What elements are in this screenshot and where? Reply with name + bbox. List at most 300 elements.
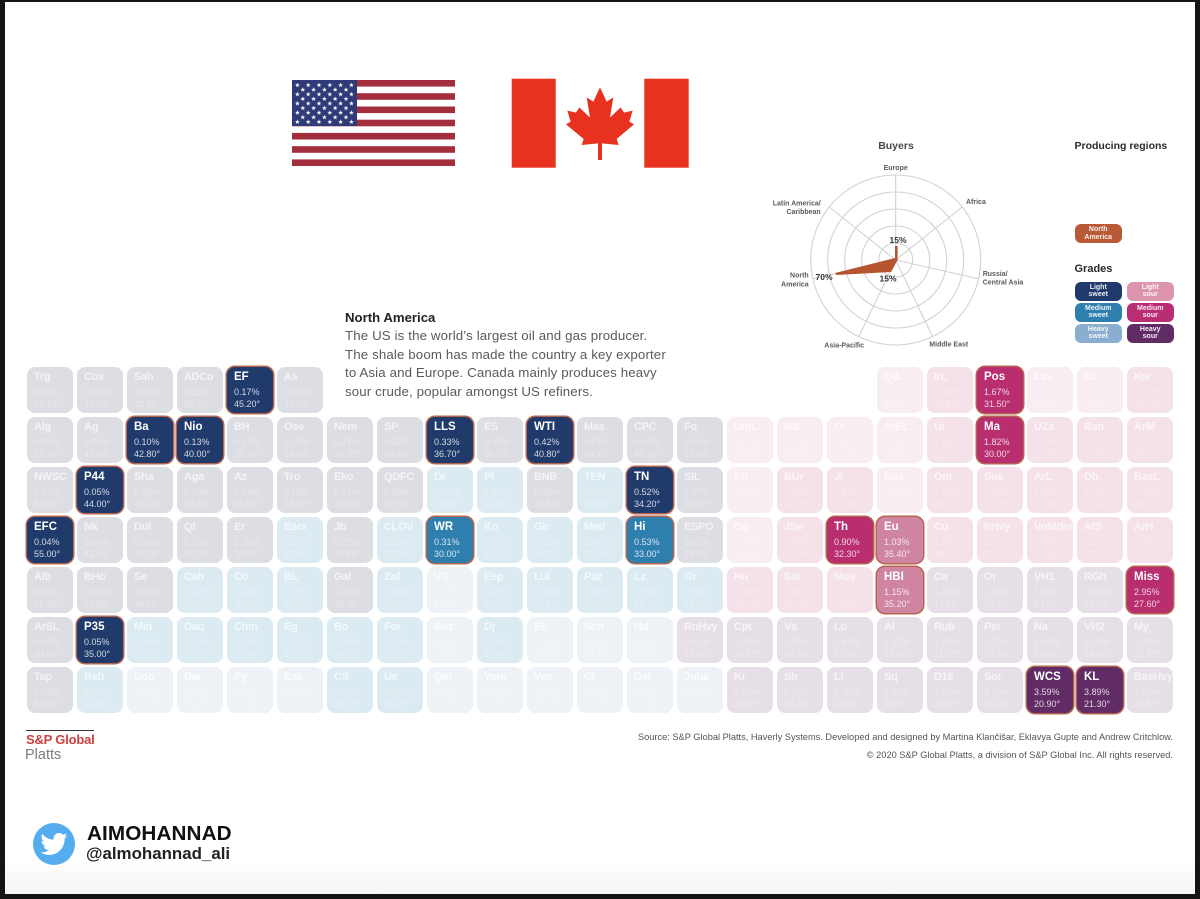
cell Lul: Lul — [534, 571, 550, 583]
cell Sat — [777, 567, 823, 613]
cell NWSC: 63.00° — [34, 498, 60, 508]
cell BNB: 0.40% — [534, 487, 560, 497]
cell BUr: 32.30° — [784, 498, 810, 508]
cell Daq: Daq — [184, 621, 204, 633]
cell Cu — [927, 517, 973, 563]
cell CLOV: CLOV — [384, 521, 413, 533]
cell FG: 30.70° — [734, 498, 760, 508]
cell Py — [227, 667, 273, 713]
cell AlS — [1077, 517, 1123, 563]
cell CS: CS — [334, 671, 349, 683]
cell Tap — [27, 667, 73, 713]
cell Ban: 2.45% — [1084, 437, 1110, 447]
cell Co: Co — [234, 571, 248, 583]
cell Tap: 0.03% — [34, 687, 60, 697]
radar chart: buyers — [773, 165, 1024, 350]
cell Tro: Tro — [284, 471, 300, 483]
cell Sha: 42.20° — [134, 498, 160, 508]
cell LLS: 36.70° — [434, 448, 460, 458]
cell Eu: 35.40° — [884, 548, 910, 558]
cell Kw: 2.52% — [1134, 387, 1160, 397]
cell ADCo: ADCo — [184, 371, 213, 383]
cell Sat: 0.81% — [784, 587, 810, 597]
cell Sh — [777, 667, 823, 713]
cell Fo: 0.54% — [684, 437, 710, 447]
cell AlS: 2.27% — [1084, 537, 1110, 547]
cell Ca: Ca — [934, 571, 947, 583]
cell Cpt — [727, 617, 773, 663]
cell Mb: 34.20° — [784, 448, 810, 458]
grade row 3 — [27, 466, 1173, 514]
cell Alb: Alb — [34, 571, 51, 583]
cell ES: 0.37% — [484, 437, 510, 447]
cell Fo: 37.30° — [684, 448, 710, 458]
cell Rab: 0.07% — [84, 687, 110, 697]
cell Pl: Pl — [484, 471, 494, 483]
cell P35: 35.00° — [84, 648, 110, 658]
cell Rab: Rab — [84, 671, 104, 683]
radar axis labels — [773, 165, 1023, 350]
cell KL: KL — [1084, 671, 1099, 683]
cell Lo: 22.30° — [834, 648, 860, 658]
grade row 2 — [27, 416, 1173, 464]
cell HBI: 35.20° — [884, 598, 910, 608]
cell BUr — [777, 467, 823, 513]
cell NWSC: 0.01% — [34, 487, 60, 497]
cell Mas — [577, 417, 623, 463]
cell Rub — [927, 617, 973, 663]
cell NWSC: NWSC — [34, 471, 66, 483]
cell Cu: 28.50° — [934, 548, 960, 558]
cell Kir: Kir — [1084, 371, 1098, 383]
cell RGh: 24.00° — [1084, 598, 1110, 608]
cell Vs: Vs — [784, 621, 797, 633]
cell KL: 3.89% — [1084, 687, 1110, 697]
cell Ql: 36.00° — [184, 548, 210, 558]
cell Er: Er — [234, 521, 245, 533]
cell Ji: 32.30° — [834, 498, 860, 508]
cell Gir: 29.70° — [534, 548, 560, 558]
cell RnHvy: 22.80° — [684, 648, 710, 658]
cell VnMdm: 1.95% — [1034, 537, 1060, 547]
cell Se: 0.09% — [134, 587, 160, 597]
cell ArM: 2.54% — [1134, 437, 1160, 447]
cell Vs: 0.83% — [784, 637, 810, 647]
cell Us: Us — [384, 671, 397, 683]
cell Ko: Ko — [484, 521, 498, 533]
cell ESPO — [677, 517, 723, 563]
cell Ji: Ji — [834, 471, 843, 483]
cell Chm: 0.12% — [234, 637, 260, 647]
cell Ba: Ba — [134, 421, 149, 433]
cell SP: SP — [384, 421, 398, 433]
cell Cos: Cos — [84, 371, 104, 383]
cell Trg — [27, 367, 73, 413]
cell LLS: LLS — [434, 421, 456, 433]
cell IrL: 33.60° — [934, 398, 960, 408]
cell Db: 30.40° — [1084, 498, 1110, 508]
cell D16 — [927, 667, 973, 713]
cell Dr: 33.00° — [434, 498, 460, 508]
cell Hu: 0.84% — [734, 587, 760, 597]
cell Alb: 51.70° — [34, 598, 60, 608]
cell Kir: 2.27% — [1084, 387, 1110, 397]
cell FG: FG — [734, 471, 749, 483]
cell Nk: Nk — [84, 521, 97, 533]
cell My: My — [1134, 621, 1149, 633]
cell Kw: Kw — [1134, 371, 1150, 383]
cell Na: 1.96% — [1034, 637, 1060, 647]
cell Sch — [577, 617, 623, 663]
cell VH2: 16.00° — [1084, 648, 1110, 658]
grade: heavy sour — [1127, 324, 1174, 342]
cell Ba — [127, 417, 173, 463]
cell TN: 34.20° — [634, 498, 660, 508]
cell Miss: Miss — [1134, 571, 1160, 583]
cell Daq — [177, 617, 223, 663]
cell VnMdm — [1027, 517, 1073, 563]
cell Hi — [627, 517, 673, 563]
cell Nem: 39.90° — [334, 448, 360, 458]
grade row 7 — [27, 666, 1173, 714]
cell BasL: 3.15% — [1134, 487, 1160, 497]
cell Gr: 0.59% — [684, 587, 710, 597]
cell Ban: Ban — [1084, 421, 1104, 433]
cell ADCo: 58.40° — [184, 398, 210, 408]
cell Ose: 0.20% — [284, 437, 310, 447]
cell Or: 1.63% — [984, 587, 1010, 597]
cell IrHvy: 29.30° — [984, 548, 1010, 558]
cell Li: Li — [834, 671, 843, 683]
cell Hd — [627, 617, 673, 663]
cell Esp: 32.20° — [484, 598, 510, 608]
cell Sah: 0.10% — [134, 387, 160, 397]
cell Escr: 0.17% — [284, 537, 310, 547]
cell Nem: 0.21% — [334, 437, 360, 447]
cell Dr: 0.29% — [434, 487, 460, 497]
cell RGh — [1077, 567, 1123, 613]
cell Pl: 32.20° — [484, 498, 510, 508]
cell Bo — [327, 617, 373, 663]
cell UZa — [1027, 417, 1073, 463]
cell Chm: 26.90° — [234, 648, 260, 658]
cell ES: 36.70° — [484, 448, 510, 458]
cell Cab: Cab — [184, 571, 204, 583]
cell Hd: Hd — [634, 621, 648, 633]
cell EF: EF — [234, 371, 249, 383]
cell My — [1127, 617, 1173, 663]
cell Das: 1.27% — [884, 487, 910, 497]
grade row 4 — [26, 516, 1173, 564]
cell Rab: 33.40° — [84, 698, 110, 708]
cell WR: 0.31% — [434, 537, 460, 547]
cell IrL — [927, 367, 973, 413]
cell BasL: 28.50° — [1134, 498, 1160, 508]
cell CPC — [627, 417, 673, 463]
cell Gir: 0.42% — [534, 537, 560, 547]
legend: North America region pill: America — [1084, 234, 1112, 241]
cell Sh: Sh — [784, 671, 797, 683]
cell Th: 32.30° — [834, 548, 860, 558]
cell Chm: Chm — [234, 621, 258, 633]
cell JSv: 0.90% — [784, 537, 810, 547]
cell Pos: Pos — [984, 371, 1005, 383]
cell Jb: Jb — [334, 521, 346, 533]
legend: grades — [1075, 282, 1174, 343]
cell Sq: 9.00° — [884, 698, 905, 708]
cell Tro: 34.50° — [284, 498, 310, 508]
cell Az: 0.14% — [234, 487, 260, 497]
logo: S&P Global Platts: Platts — [25, 747, 61, 763]
cell Lo — [827, 617, 873, 663]
grade row 1 — [27, 366, 1173, 414]
cell EF — [227, 367, 273, 413]
cell Ma: 30.00° — [984, 448, 1010, 458]
cell Om: 33.50° — [934, 498, 960, 508]
cell Escr: 33.50° — [284, 548, 310, 558]
radar axis labels: Central Asia — [983, 280, 1023, 286]
cell Py: 0.12% — [234, 687, 260, 697]
cell Og: 0.75% — [734, 537, 760, 547]
cell TN: TN — [634, 471, 649, 483]
cell P35: 0.05% — [84, 637, 110, 647]
cell Dj: 27.60° — [484, 648, 510, 658]
cell ESPO: 34.70° — [684, 548, 710, 558]
cell BNB — [527, 467, 573, 513]
cell Cl: 23.30° — [584, 698, 610, 708]
cell Li — [827, 667, 873, 713]
cell Lav: 34.70° — [1034, 398, 1060, 408]
cell Lul: 30.50° — [534, 598, 560, 608]
cell Cos: 0.04% — [84, 387, 110, 397]
grade: light sweet — [1075, 282, 1122, 300]
cell Ca: 1.41% — [934, 587, 960, 597]
cell Lz — [627, 567, 673, 613]
cell ArH: 2.75% — [1134, 537, 1160, 547]
cell D16: 16.00° — [934, 698, 960, 708]
cell ESPO: ESPO — [684, 521, 713, 533]
cell Tap: Tap — [34, 671, 52, 683]
cell Eb: 0.33% — [534, 637, 560, 647]
cell Eko — [327, 467, 373, 513]
cell BHo — [77, 567, 123, 613]
cell Sor — [977, 667, 1023, 713]
region description: sour crude, popular amongst US refiners. — [345, 384, 593, 399]
cell Zaf: Zaf — [384, 571, 400, 583]
cell Az — [227, 467, 273, 513]
cell QtL: 1.02% — [884, 387, 910, 397]
cell Nio: Nio — [184, 421, 203, 433]
cell Escr — [277, 517, 323, 563]
cell Boz: Boz — [434, 621, 453, 633]
grade: medium sweet: Medium — [1085, 304, 1111, 312]
cell Chm — [227, 617, 273, 663]
flag: United States — [292, 80, 455, 166]
cell D16: 4.10% — [934, 687, 960, 697]
cell Tro — [277, 467, 323, 513]
cell EF: 0.17% — [234, 387, 260, 397]
cell Lo: 0.87% — [834, 637, 860, 647]
cell Vs — [777, 617, 823, 663]
copyright notice: © 2020 S&P Global Platts, a division of S&P Global Inc. All rights reserved. — [867, 750, 1173, 760]
cell Eb — [527, 617, 573, 663]
cell Ma: 1.82% — [984, 437, 1010, 447]
cell ArL: 33.20° — [1034, 498, 1060, 508]
cell Cab: 0.12% — [184, 587, 210, 597]
cell Ca: 17.50° — [934, 598, 960, 608]
cell Juba: Juba — [684, 671, 708, 683]
cell Yom: Yom — [484, 671, 506, 683]
cell Cab: 32.60° — [184, 598, 210, 608]
radar axis labels: Latin America/ — [773, 200, 821, 208]
cell SP: 58.40° — [384, 448, 410, 458]
cell Miss: 2.95% — [1134, 587, 1160, 597]
cell As: 0.18% — [284, 387, 310, 397]
cell Sq: 3.50% — [884, 687, 910, 697]
cell Gal — [327, 567, 373, 613]
cell Vs: 24.30° — [784, 648, 810, 658]
grade: light sour: Light — [1142, 284, 1159, 290]
cell Cpt: 0.70% — [734, 637, 760, 647]
grade: medium sweet: sweet — [1089, 312, 1108, 319]
cell Dar: 25.20° — [184, 698, 210, 708]
logo: S&P Global Platts: S&P Global — [26, 732, 95, 747]
cell Mb: 0.79% — [784, 437, 810, 447]
cell Boz: 16.00° — [434, 648, 460, 658]
cell Rub: 1.33% — [934, 637, 960, 647]
cell IrHvy: IrHvy — [984, 521, 1010, 533]
cell TEN: 0.43% — [584, 487, 610, 497]
cell JSv — [777, 517, 823, 563]
cell Ag: 47.90° — [84, 448, 110, 458]
cell For: For — [384, 621, 401, 633]
cell Us: 0.27% — [384, 687, 410, 697]
cell Pos: 31.50° — [984, 398, 1010, 408]
cell VnMdm: 27.00° — [1034, 548, 1060, 558]
cell IrHvy — [977, 517, 1023, 563]
cell Sat: 27.00° — [784, 598, 810, 608]
cell AlS: 28.10° — [1084, 548, 1110, 558]
cell Dob: 0.09% — [134, 687, 160, 697]
cell ES — [477, 417, 523, 463]
cell Med: 0.47% — [584, 537, 610, 547]
cell ArSL: 50.60° — [34, 648, 60, 658]
cell Sue — [977, 467, 1023, 513]
cell UmL: 36.90° — [734, 448, 760, 458]
cell Cl: 0.41% — [584, 687, 610, 697]
cell Paz: 25.60° — [584, 598, 610, 608]
cell ADCo: 0.11% — [184, 387, 209, 397]
radar axis labels: Russia/ — [983, 271, 1008, 278]
cell Ban: 31.80° — [1084, 448, 1110, 458]
cell Or: Or — [984, 571, 996, 583]
cell Dj: 0.34% — [484, 637, 510, 647]
cell Er — [227, 517, 273, 563]
cell ArSL: ArSL — [34, 621, 59, 633]
cell Esp: 0.32% — [484, 587, 510, 597]
cell UZa: UZa — [1034, 421, 1054, 433]
cell Sq: Sq — [884, 671, 897, 683]
cell CPC: 46.20° — [634, 448, 660, 458]
cell CS: 0.20% — [334, 687, 360, 697]
cell Lul — [527, 567, 573, 613]
cell Dul: 0.08% — [134, 537, 160, 547]
cell Us: 29.20° — [384, 698, 410, 708]
grade: heavy sweet — [1075, 324, 1122, 342]
cell BasHvy: 23.50° — [1134, 698, 1160, 708]
cell P44: 0.05% — [84, 487, 110, 497]
cell Cpt: Cpt — [734, 621, 751, 633]
cell Om: 1.38% — [934, 487, 960, 497]
cell EFC: EFC — [34, 521, 57, 533]
cell Nem — [327, 417, 373, 463]
cell RnHvy — [677, 617, 723, 663]
cell HBI: HBI — [884, 571, 904, 583]
cell Al: 19.60° — [884, 648, 910, 658]
cell Ji — [827, 467, 873, 513]
cell Hi: 33.00° — [634, 548, 660, 558]
cell ArL: 1.96% — [1034, 487, 1060, 497]
cell Gir: Gir — [534, 521, 549, 533]
cell Dul — [127, 517, 173, 563]
cell Sha — [127, 467, 173, 513]
region description: to Asia and Europe. Canada mainly produces heavy — [345, 365, 657, 380]
cell Zaf: 30.00° — [384, 598, 410, 608]
cell Oi: Oi — [834, 421, 845, 433]
cell Miss — [1127, 567, 1173, 613]
cell Juba — [677, 667, 723, 713]
cell Juba: 17.10° — [684, 698, 710, 708]
cell Co: 30.70° — [234, 598, 260, 608]
cell Sue: 29.80° — [984, 498, 1010, 508]
cell Al: Al — [884, 621, 894, 633]
cell WCS: 20.90° — [1034, 698, 1060, 708]
cell Nem: Nem — [334, 421, 357, 433]
logo: S&P Global Platts — [25, 730, 95, 763]
cell Per: 1.79% — [984, 637, 1010, 647]
cell Med: 32.90° — [584, 548, 610, 558]
cell Og: Og — [734, 521, 749, 533]
cell Ur: 31.10° — [934, 448, 960, 458]
cell Eu: 1.03% — [884, 537, 910, 547]
cell HBI: 1.15% — [884, 587, 910, 597]
cell My: 21.80° — [1134, 648, 1160, 658]
cell Az: 35.00° — [234, 498, 260, 508]
cell Daq: 0.11% — [184, 637, 209, 647]
cell Gr: Gr — [684, 571, 696, 583]
cell WR — [427, 517, 473, 563]
cell Ql — [177, 517, 223, 563]
cell RnHvy: 0.51% — [684, 637, 710, 647]
cell KL — [1077, 667, 1123, 713]
cell Om — [927, 467, 973, 513]
cell Qin: Qin — [434, 671, 451, 683]
cell Sha: Sha — [134, 471, 153, 483]
cell Pl: 0.37% — [484, 487, 510, 497]
radar polygon: North America share — [835, 246, 898, 275]
cell Mos: 28.30° — [834, 598, 860, 608]
cell Bo: 0.20% — [334, 637, 360, 647]
cell Og: 33.50° — [734, 548, 760, 558]
cell Ur: 1.44% — [934, 437, 960, 447]
cell Escr: Escr — [284, 521, 307, 533]
cell Aga: Aga — [184, 471, 204, 483]
cell Ag: Ag — [84, 421, 98, 433]
cell Dar: 0.12% — [184, 687, 210, 697]
cell Th: 0.90% — [834, 537, 860, 547]
cell Kr: 14.00° — [734, 698, 760, 708]
cell Kr: Kr — [734, 671, 746, 683]
